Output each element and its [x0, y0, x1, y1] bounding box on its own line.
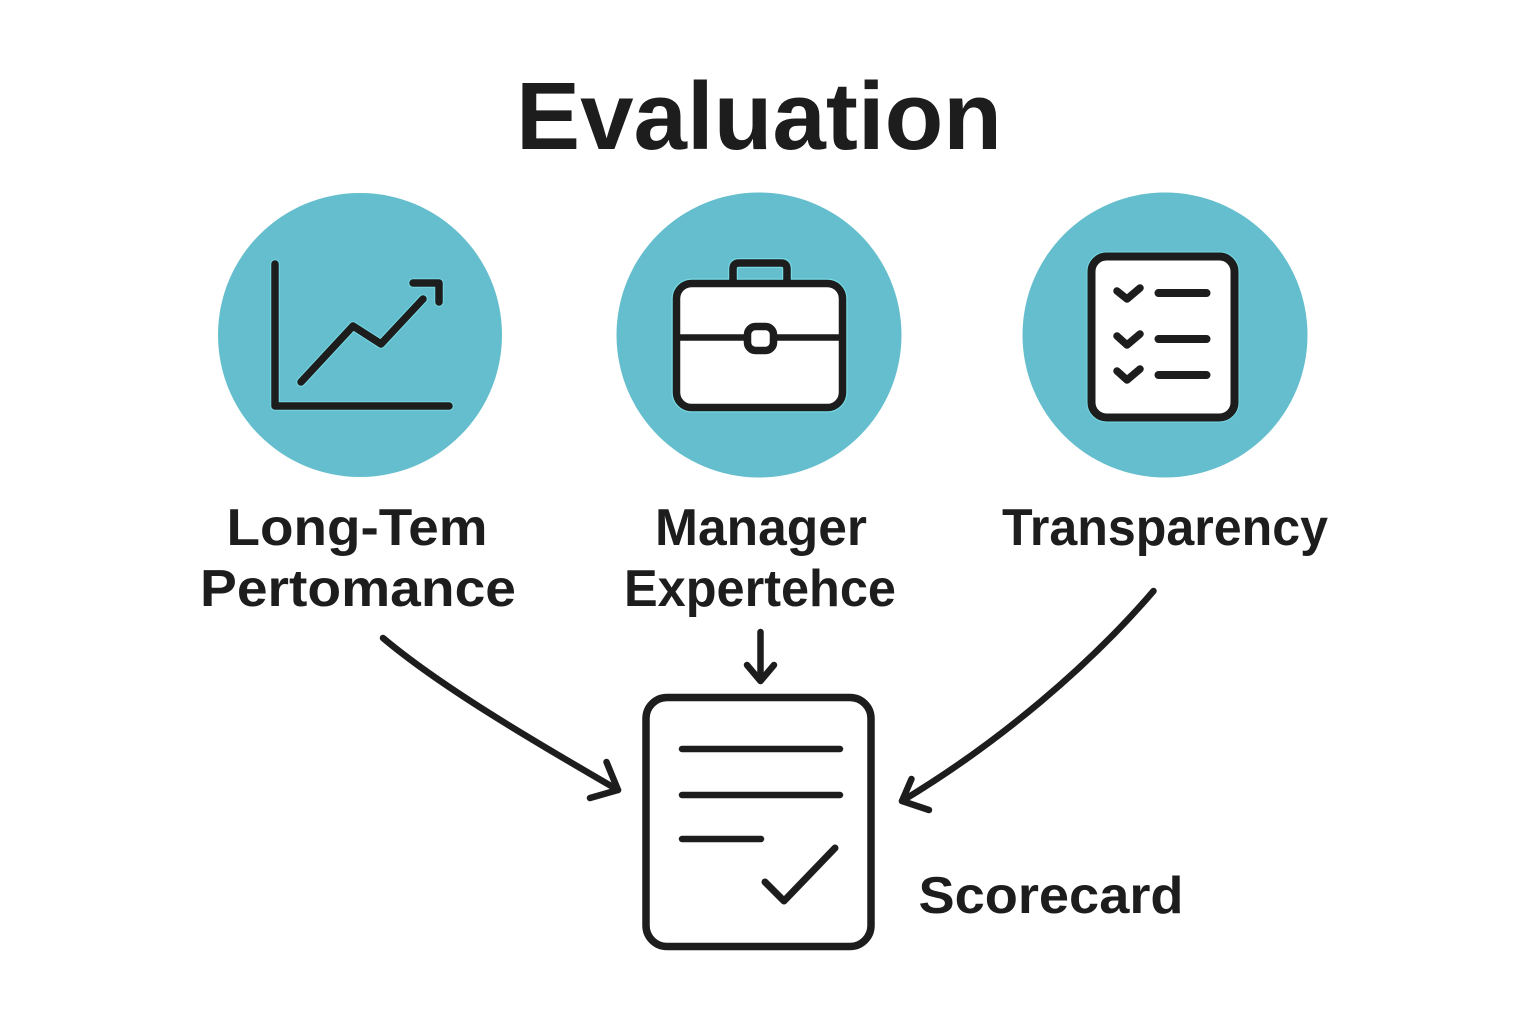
icon: scorecard document: [646, 698, 871, 946]
label: manager expertise: [624, 499, 896, 618]
label: manager expertise: Manager: [655, 499, 867, 557]
circle: transparency: [1022, 192, 1308, 478]
arrow: transparency to scorecard: [902, 591, 1154, 810]
icon: briefcase: [676, 263, 842, 408]
icon: line chart: [275, 264, 449, 406]
label: manager expertise: Expertehce: [624, 560, 896, 618]
arrow: long-term performance to scorecard: [383, 638, 618, 798]
label: long-term performance: Long-Tem: [226, 499, 488, 557]
circle: manager expertise: [616, 192, 902, 478]
panel: manager expertise: [616, 192, 902, 618]
icon: checklist: [1092, 256, 1234, 418]
circle: long-term performance: [218, 193, 502, 477]
label: long-term performance: [200, 499, 516, 618]
label: transparency: Transparency: [1002, 499, 1328, 557]
label: long-term performance: Pertomance: [200, 560, 516, 618]
label: scorecard: Scorecard: [918, 867, 1184, 925]
panel: long-term performance: [200, 193, 516, 618]
title: Evaluation: [516, 63, 1002, 170]
panel: transparency: [1002, 192, 1328, 557]
arrow: manager expertise to scorecard: [747, 632, 774, 681]
